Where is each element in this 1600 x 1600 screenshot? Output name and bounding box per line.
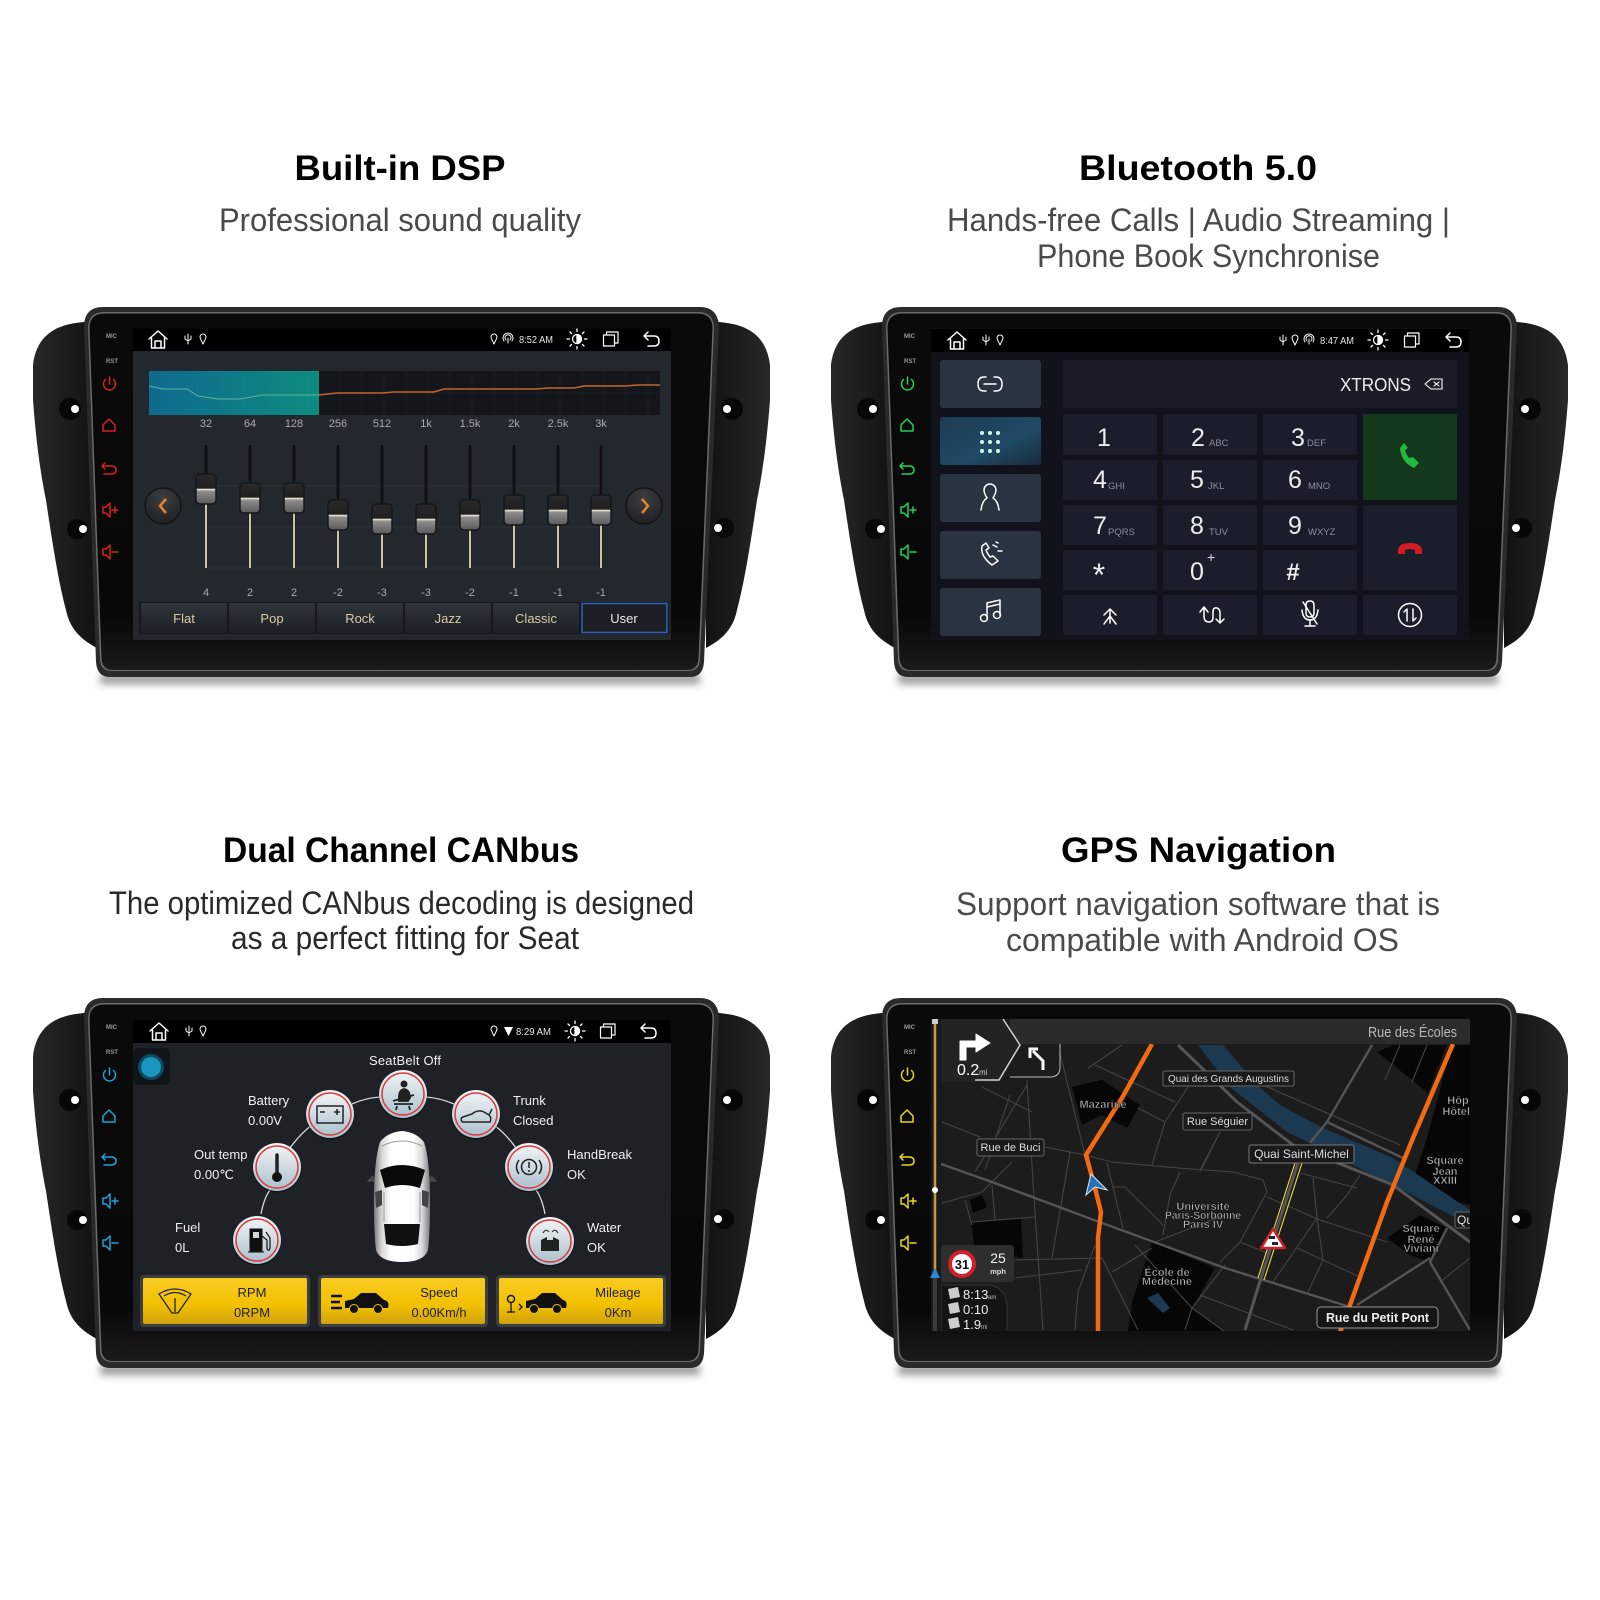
slider values: -3 — [377, 587, 387, 599]
trip info panel: 1.9 — [963, 1317, 981, 1332]
keypad: TUV — [1209, 527, 1229, 538]
status: HandBreak: HandBreak — [567, 1147, 633, 1162]
device body — [33, 998, 770, 1375]
city blocks — [970, 1045, 1470, 1332]
heading: GPS Navigation — [956, 831, 1440, 958]
frequency labels: 2.5k — [548, 418, 569, 430]
status: HandBreak: OK — [567, 1167, 586, 1182]
number display: XTRONS — [1340, 375, 1411, 395]
status bar — [931, 329, 1469, 352]
speed limit panel — [941, 1245, 1014, 1282]
minor roads — [942, 1045, 1470, 1332]
keypad — [1063, 414, 1457, 635]
main turn panel: 0.2 — [957, 1062, 979, 1079]
keypad: 4 — [1093, 466, 1107, 494]
street label: Quai Saint-Michel: Quai Saint-Michel — [1254, 1147, 1349, 1161]
heading: Dual Channel CANbus — [109, 831, 694, 956]
frequency labels: 64 — [244, 418, 256, 430]
street label: Rue de Buci: Rue de Buci — [981, 1142, 1040, 1154]
keypad: # — [1286, 559, 1300, 586]
gauge: Speed: 0.00Km/h — [412, 1305, 466, 1320]
gauge: Mileage: 0Km — [605, 1305, 631, 1320]
frequency labels: 32 — [200, 418, 212, 430]
icon: contact — [981, 484, 999, 510]
gauge: Speed — [318, 1275, 488, 1327]
status: Water: OK — [587, 1240, 606, 1255]
heading: Bluetooth 5.0 — [947, 149, 1450, 274]
side buttons: blue: MIC — [106, 1025, 118, 1031]
frequency labels: 1.5k — [460, 418, 481, 430]
status: Out temp: 0.00℃ — [194, 1167, 234, 1182]
status: Fuel: Fuel — [175, 1220, 200, 1235]
screen background — [133, 328, 671, 640]
place names: Hôtel- — [1442, 1106, 1474, 1118]
status: Battery — [248, 1090, 354, 1140]
street label: Rue Séguier — [1183, 1113, 1252, 1130]
side buttons: blue — [102, 1025, 118, 1250]
frequency response graph — [149, 371, 660, 415]
main turn panel: mi — [979, 1068, 988, 1077]
gauge: RPM: RPM — [238, 1285, 266, 1300]
side buttons: red: MIC — [106, 334, 118, 340]
status bar: 8:52 AM — [519, 335, 553, 346]
keypad: DEF — [1307, 438, 1326, 449]
next turn panel — [1010, 1044, 1060, 1078]
street label: Rue de Buci — [977, 1139, 1044, 1156]
number display — [1063, 360, 1457, 408]
keypad: PQRS — [1108, 527, 1135, 538]
yellow highlight road — [1258, 1163, 1302, 1280]
slider values: -1 — [553, 587, 563, 599]
keypad: GHI — [1108, 481, 1125, 492]
street label: cropped: Qu — [1457, 1213, 1473, 1227]
trip info panel: am — [988, 1295, 996, 1301]
panel: DSP equaliser head unit — [33, 307, 770, 684]
main roads — [941, 1045, 1470, 1330]
gauge: RPM: 0RPM — [234, 1305, 270, 1320]
heading: Bluetooth 5.0: Bluetooth 5.0 — [1079, 149, 1317, 188]
place names — [1079, 1095, 1474, 1288]
slider values: -1 — [509, 587, 519, 599]
status: SeatBelt — [369, 1053, 441, 1120]
route progress bar — [930, 1019, 941, 1331]
place names: Square — [1426, 1155, 1464, 1167]
preset buttons: User — [610, 611, 638, 626]
heading: Built-in DSP: Built-in DSP — [294, 149, 506, 188]
keypad: 1 — [1097, 424, 1111, 452]
place names: École de — [1144, 1266, 1190, 1279]
call control icons — [1104, 601, 1422, 626]
heading: GPS Navigation: compatible with Android OS — [1006, 922, 1399, 958]
status: Water: Water — [587, 1220, 622, 1235]
place names: Paris-Sorbonne — [1165, 1210, 1241, 1222]
floating teal button — [133, 1048, 170, 1085]
place names: Square — [1402, 1223, 1440, 1235]
top street bar: Rue des Écoles — [1368, 1024, 1457, 1041]
main turn panel — [958, 1019, 1021, 1081]
side buttons: blue: RST — [106, 1050, 118, 1056]
icon: recent calls — [982, 542, 1002, 565]
trip info panel: 0:10 — [963, 1302, 988, 1317]
car top view — [368, 1131, 436, 1262]
slider values: -2 — [333, 587, 343, 599]
heading: GPS Navigation: GPS Navigation — [1061, 831, 1336, 870]
place names: Médecine — [1142, 1276, 1192, 1288]
heading: Built-in DSP — [219, 149, 581, 238]
heading: Dual Channel CANbus: Dual Channel CANbus — [223, 831, 579, 870]
street label: Quai des Grands Augustins: Quai des Grands Augustins — [1168, 1073, 1289, 1085]
street label: Rue Séguier: Rue Séguier — [1187, 1116, 1248, 1128]
status: Trunk: Closed — [513, 1113, 553, 1128]
side buttons: red: RST — [106, 359, 118, 365]
heading: Built-in DSP: Professional sound quality — [219, 202, 581, 238]
side buttons: yellow — [900, 1025, 916, 1250]
preset buttons: Rock — [345, 611, 375, 626]
street label: Rue du Petit Pont: Rue du Petit Pont — [1326, 1310, 1430, 1325]
status: Battery: Battery — [248, 1093, 290, 1108]
speed limit panel: 25 — [990, 1250, 1006, 1266]
position arrow — [1086, 1174, 1107, 1195]
keypad: 7 — [1093, 512, 1107, 540]
connecting arcs — [261, 1097, 545, 1214]
keypad: * — [1093, 557, 1105, 593]
gauge: RPM — [140, 1275, 310, 1327]
right arrow button — [626, 488, 662, 524]
top street bar — [1010, 1019, 1471, 1044]
icon: link — [978, 377, 1002, 391]
frequency labels — [200, 418, 607, 430]
call button — [1363, 414, 1457, 500]
panel: GPS navigation head unit — [831, 998, 1568, 1375]
keypad: 3 — [1291, 424, 1305, 452]
device body — [831, 307, 1568, 684]
preset buttons: Classic — [515, 611, 557, 626]
side buttons: green: RST — [904, 359, 916, 365]
preset buttons: Pop — [260, 611, 284, 626]
device body — [831, 998, 1568, 1375]
gauge: Mileage — [496, 1275, 666, 1327]
side buttons: yellow: RST — [904, 1050, 916, 1056]
frequency labels: 256 — [329, 418, 347, 430]
status: Out temp: Out temp — [194, 1147, 247, 1162]
trip info panel: 8:13 — [963, 1287, 988, 1302]
slider values: -1 — [596, 587, 606, 599]
keypad: 0 — [1190, 558, 1204, 586]
left arrow button — [145, 488, 181, 524]
panel: CANbus vehicle status head unit — [33, 998, 770, 1375]
gauge: Speed: Speed — [420, 1285, 458, 1300]
panel: Bluetooth dialer head unit — [831, 307, 1568, 684]
keypad: 5 — [1190, 466, 1204, 494]
slider values: 2 — [247, 587, 253, 599]
place names: Jean — [1432, 1166, 1458, 1178]
place names: XXIII — [1433, 1175, 1457, 1187]
keypad: ABC — [1209, 438, 1229, 449]
status bar — [133, 328, 671, 351]
icon: music — [980, 600, 1000, 622]
river — [1198, 1045, 1470, 1225]
place names: Hôp — [1447, 1095, 1469, 1107]
status: Trunk — [452, 1090, 553, 1140]
screen background — [931, 328, 1469, 640]
preset buttons: Flat — [173, 611, 195, 626]
heading: GPS Navigation: Support navigation software that is — [956, 886, 1440, 922]
keypad: JKL — [1208, 481, 1224, 492]
heading: Dual Channel CANbus: The optimized CANbus decoding is designed — [109, 885, 694, 921]
place names: Université — [1176, 1201, 1230, 1213]
status bar — [133, 1020, 671, 1043]
frequency labels: 1k — [420, 418, 432, 430]
orange routes — [1086, 1044, 1453, 1332]
status: Battery: 0.00V — [248, 1113, 282, 1128]
preset buttons: Jazz — [435, 611, 461, 626]
slider values — [203, 587, 606, 599]
status: Out temp — [194, 1143, 302, 1192]
keypad: 9 — [1288, 512, 1302, 540]
frequency labels: 512 — [373, 418, 391, 430]
hang up button — [1363, 505, 1457, 590]
icon: dial pad — [980, 431, 1000, 453]
status bar: 8:29 AM — [516, 1027, 551, 1038]
status: Water — [526, 1217, 622, 1266]
trip info panel — [941, 1285, 1007, 1332]
place names: Paris IV — [1183, 1219, 1224, 1231]
street label: Rue du Petit Pont — [1317, 1307, 1438, 1328]
heading: Dual Channel CANbus: as a perfect fitting for Seat — [231, 920, 579, 956]
traffic warning sign — [1261, 1229, 1285, 1248]
frequency labels: 3k — [595, 418, 607, 430]
left navigation buttons — [940, 360, 1041, 636]
keypad: + — [1207, 549, 1215, 565]
status: SeatBelt: SeatBelt Off — [369, 1053, 441, 1068]
heading: Bluetooth 5.0: Phone Book Synchronise — [1037, 238, 1380, 274]
eq sliders — [196, 445, 611, 568]
keypad: 8 — [1190, 512, 1204, 540]
device body — [33, 307, 770, 684]
slider values: 2 — [291, 587, 297, 599]
keypad: 2 — [1191, 424, 1205, 452]
status: Fuel — [175, 1216, 282, 1266]
frequency labels: 2k — [508, 418, 520, 430]
frequency labels: 128 — [285, 418, 303, 430]
status: HandBreak — [504, 1143, 633, 1192]
preset buttons — [139, 602, 669, 634]
keypad: MNO — [1308, 481, 1330, 492]
side buttons: green: MIC — [904, 334, 916, 340]
speed limit panel: 31 — [955, 1257, 969, 1272]
street label: cropped — [1454, 1212, 1470, 1228]
heading: Bluetooth 5.0: Hands-free Calls | Audio Streaming | — [947, 202, 1450, 238]
map — [931, 1019, 1475, 1332]
keypad: WXYZ — [1308, 527, 1336, 538]
side buttons: green — [900, 334, 916, 559]
side buttons: red — [102, 334, 118, 559]
side buttons: yellow: MIC — [904, 1025, 916, 1031]
speed limit panel: mph — [990, 1267, 1006, 1276]
trip info panel: mi — [981, 1325, 987, 1331]
slider values: -3 — [421, 587, 431, 599]
place names: René — [1408, 1234, 1434, 1246]
place names: Viviani — [1403, 1243, 1439, 1255]
slider values: -2 — [465, 587, 475, 599]
screen background — [133, 1020, 671, 1331]
status bar: 8:47 AM — [1320, 336, 1354, 347]
status: Trunk: Trunk — [513, 1093, 546, 1108]
slider values: 4 — [203, 587, 209, 599]
gauge: Mileage: Mileage — [595, 1285, 641, 1300]
place names: Mazarine — [1079, 1099, 1127, 1111]
status: Fuel: 0L — [175, 1240, 189, 1255]
keypad: 6 — [1288, 466, 1302, 494]
